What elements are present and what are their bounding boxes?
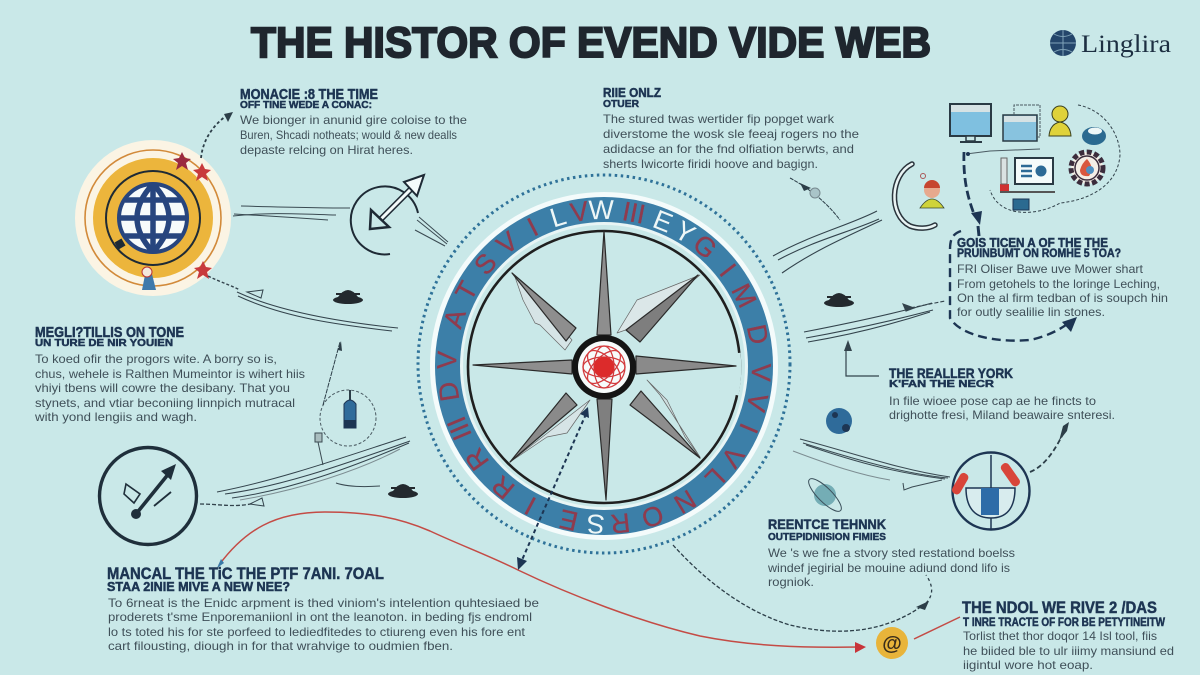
flow lines: centre to person xyxy=(773,211,882,273)
text block: bottom right: iigintul wore hot eoap. xyxy=(963,658,1093,672)
text block: top centre xyxy=(603,86,859,171)
text block: middle left: MEGLI?TILLIS ON TONE xyxy=(35,325,184,341)
text block: bottom left: MANCAL THE TiC THE PTF 7ANI. 7OAL xyxy=(107,564,384,583)
ring letters: I xyxy=(733,419,764,438)
ring letters: O xyxy=(638,499,667,534)
text block: realler york xyxy=(889,365,1115,422)
text block: bottom left: lo ts toted his for ste porfeed to lediedfitedes to ctiureng even his fore ent xyxy=(108,625,526,639)
text block: top centre: RIIE ONLZ xyxy=(603,86,661,100)
logo xyxy=(1050,30,1171,58)
arrow: globe to first text xyxy=(201,112,233,158)
text block: top centre: sherts Iwicorte firidi hoove and bagign. xyxy=(603,157,818,171)
ring letters: V xyxy=(568,196,591,228)
compass wheel xyxy=(418,175,790,553)
ring letters: Y xyxy=(669,215,700,250)
text block: reentce xyxy=(767,516,1015,589)
ring letters: T xyxy=(450,276,484,305)
text block: bottom right: he biided ble to ulr iiimy mansiund ed xyxy=(963,644,1174,658)
icon: gold at-sign badge: @ xyxy=(882,633,902,655)
flow lines: globe to compass xyxy=(208,276,398,331)
gear xyxy=(1071,152,1103,184)
flow lines: centre to right circle xyxy=(793,439,950,490)
text block: top left: depaste relcing on Hirat heres. xyxy=(240,143,413,157)
icon: hat right xyxy=(824,293,854,307)
ring letters: I xyxy=(520,491,541,521)
user xyxy=(1049,106,1071,136)
arrow: right circle to text xyxy=(1030,422,1069,472)
ring letters: E xyxy=(649,204,677,239)
text block: realler york: In file wioee pose cap ae he fincts to xyxy=(889,394,1096,408)
ring letters: L xyxy=(547,200,570,233)
text block: top centre: OTUER xyxy=(603,98,639,110)
compass arrow icon xyxy=(351,175,424,254)
text block: top centre: diverstome the wosk sle feeaj rogers no the xyxy=(603,127,859,141)
icon: person with arc xyxy=(894,164,944,228)
arrow: cluster to text xyxy=(964,152,982,236)
text block: upper right xyxy=(957,236,1168,319)
red curved arrow xyxy=(217,512,866,653)
ring letters xyxy=(432,195,776,539)
flow lines: globe to arrow icon xyxy=(233,206,448,246)
text block: middle left: with yond lengiis and wagh. xyxy=(34,410,197,424)
text block: realler york: drighotte fresi, Miland beawaire snteresi. xyxy=(889,408,1115,422)
ring letters: M xyxy=(725,279,762,313)
ring letters: R xyxy=(609,507,632,539)
ring letters: R xyxy=(459,443,495,476)
ring letters: R xyxy=(486,470,520,505)
text block: bottom left: cart filousting, diough in for that wrahvige to oudmien fben. xyxy=(108,639,453,653)
text block: reentce: We 's we fne a stvory sted restationd boelss xyxy=(768,546,1015,560)
bowl xyxy=(1082,127,1106,145)
text block: realler york: K'FAN THE NECR xyxy=(889,378,994,390)
ring letters: V xyxy=(491,226,524,261)
icon: bottle with dashed orbit xyxy=(315,341,380,487)
globe emblem xyxy=(75,140,231,296)
icon: right circle emblem xyxy=(951,452,1030,530)
monitor xyxy=(950,104,991,143)
text block: top left xyxy=(240,87,467,157)
compass hub xyxy=(572,335,636,399)
text block: upper right: FRI Oliser Bawe uve Mower shart xyxy=(957,262,1144,276)
ring letters: D xyxy=(741,322,774,347)
text block: top left: MONACIE :8 THE TIME xyxy=(240,87,378,103)
ring letters: III xyxy=(441,412,478,445)
text block: reentce: windef jegirial be mouine adiund dond lifo is xyxy=(767,561,1010,575)
text block: bottom left: proderets t'sme Enporemaniionl in ont the leanoton. in beding fjs endroml xyxy=(108,610,532,624)
title: THE HISTOR OF EVEND VIDE WEB xyxy=(251,19,931,67)
flow lines: centre to upper right text xyxy=(804,301,945,342)
ring letters: I xyxy=(523,212,543,242)
text block: middle left xyxy=(34,325,305,424)
laptop xyxy=(1000,158,1055,192)
text block: reentce: OUTEPIDNIISION FIMIES xyxy=(768,531,886,543)
text block: bottom left xyxy=(107,564,539,653)
text block: upper right: for outly sealilie lin stones. xyxy=(957,305,1105,319)
flow lines: left circle to compass xyxy=(217,437,410,500)
logo: Linglira xyxy=(1081,31,1171,58)
text block: bottom right: THE NDOL WE RIVE 2 /DAS xyxy=(962,599,1157,617)
text block: reentce: rogniok. xyxy=(768,575,814,589)
icon: blue planet xyxy=(826,408,852,434)
icon: gold at-sign badge xyxy=(876,627,908,659)
text block: middle left: chus, wehele is Ralthen Mumeintor is wihert hiis xyxy=(35,367,305,381)
text block: upper right: PRUINBUMT ON ROMHE 5 TOA? xyxy=(957,248,1121,260)
text block: bottom right: Torlist thet thor doqor 14 Isl tool, fiis xyxy=(963,629,1157,643)
text block: realler york: THE REALLER YORK xyxy=(889,365,1013,381)
ring letters: D xyxy=(433,380,465,404)
ring letters: I xyxy=(714,258,742,283)
text block: bottom right xyxy=(962,599,1174,672)
ring letters: V xyxy=(715,441,750,473)
ring letters: G xyxy=(687,228,723,265)
globe stars xyxy=(173,152,212,279)
ring letters: III xyxy=(620,196,648,230)
icon: left circle with arrow xyxy=(100,448,196,544)
icon: ringed planet xyxy=(804,474,846,516)
icon cluster: technology xyxy=(950,104,1120,212)
text block: top centre: adidacse an for the fnd olfiation berwts, and xyxy=(603,142,854,156)
text block: bottom right: T INRE TRACTE OF FOR BE PETYTINEITW xyxy=(963,617,1165,629)
ring letters: L xyxy=(699,462,731,494)
ring letters: V xyxy=(746,363,776,382)
text block: reentce: REENTCE TEHNNK xyxy=(768,516,886,532)
ring letters: N xyxy=(669,484,701,519)
card xyxy=(1013,199,1029,210)
dashed connector: left circle xyxy=(200,498,264,506)
arrow: dashed to reentce xyxy=(673,545,932,631)
ring letters: A xyxy=(438,305,472,332)
ring letters: S xyxy=(468,247,503,281)
red connector line xyxy=(914,617,960,639)
ring letters: S xyxy=(586,508,606,539)
text block: top left: Buren, Shcadi notheats; would & new dealls xyxy=(240,128,457,142)
text block: top left: OFF TINE WEDE A CONAC: xyxy=(240,100,372,111)
text block: upper right: GOIS TICEN A OF THE THE xyxy=(957,236,1108,250)
text block: middle left: To koed ofir the progors wite. A borry so is, xyxy=(35,352,277,366)
text block: top left: We bionger in anunid gire coloise to the xyxy=(240,113,467,127)
text block: top centre: The stured twas wertider fip popget wark xyxy=(603,112,835,126)
text block: bottom left: To 6rneat is the Enidc arpment is thed viniom's intelention quhtesiaed be xyxy=(108,596,539,610)
double dashed arrow into compass xyxy=(517,407,589,570)
arrow: small pointer xyxy=(790,178,840,220)
text block: middle left: UN TURE DE NIR YOUIEN xyxy=(35,338,173,349)
ring letters: W xyxy=(588,195,615,225)
elbow arrow xyxy=(844,340,879,376)
text block: middle left: stynets, and vtiar beconiing linnpich mutracal xyxy=(35,396,295,410)
dashed frame arrow xyxy=(950,231,1077,341)
window xyxy=(1003,105,1040,141)
icon: hat left xyxy=(333,290,363,304)
text block: upper right: On the al firm tedban of is soupch hin xyxy=(957,291,1168,305)
icon: hat lower xyxy=(388,484,418,498)
compass star xyxy=(473,231,736,500)
text block: bottom left: STAA 2INIE MIVE A NEW NEE? xyxy=(107,580,290,594)
ring letters: V xyxy=(432,350,463,370)
text block: upper right: From getohels to the loringe Leching, xyxy=(957,277,1160,291)
ring letters: V xyxy=(740,390,774,414)
text block: middle left: vhiyi tbens will cowre the desibany. That you xyxy=(35,381,290,395)
ring letters: E xyxy=(557,503,581,537)
dashed connector xyxy=(990,105,1120,212)
